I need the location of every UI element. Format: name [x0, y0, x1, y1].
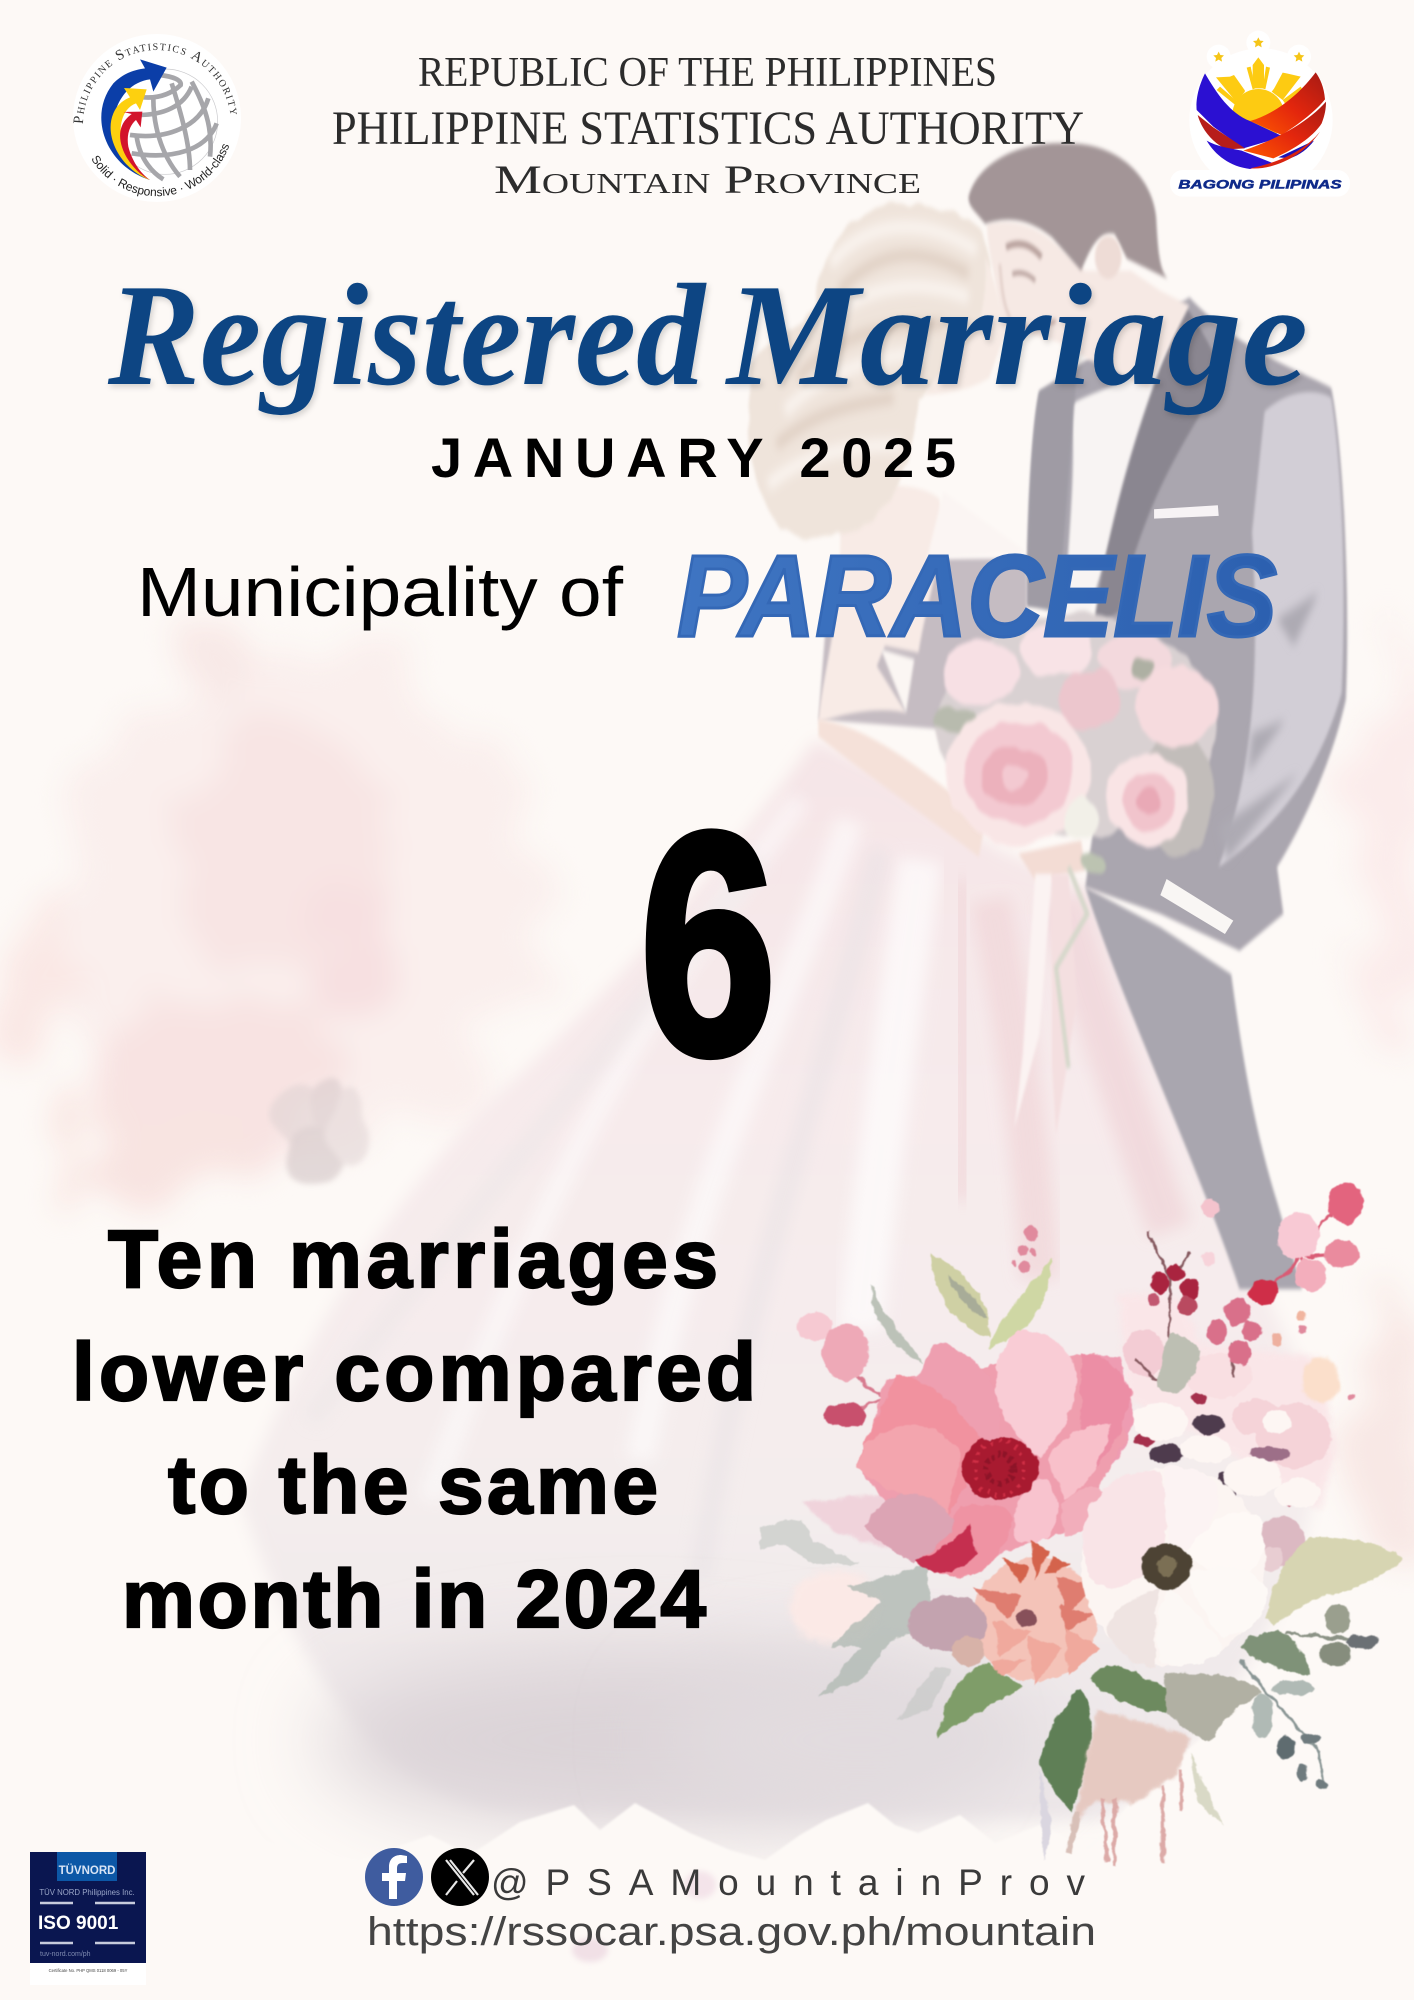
municipality label: Municipality of	[137, 553, 624, 631]
shirt	[1064, 308, 1185, 612]
paint drips	[1039, 1711, 1223, 1867]
statement line 4: month in 2024	[122, 1554, 706, 1645]
Bagong Pilipinas logo	[1170, 31, 1350, 197]
header line 1: REPUBLIC OF THE PHILIPPINES	[418, 50, 997, 96]
header: agency name	[332, 50, 1084, 202]
ribbon green strand	[1056, 867, 1087, 1068]
stars	[1213, 37, 1304, 62]
pink flower back wash	[1081, 1353, 1135, 1481]
upper right pink wash	[1119, 1293, 1335, 1509]
lower right green leaf	[1089, 1667, 1167, 1713]
badge blue tab	[57, 1852, 117, 1881]
left jacket panel	[1027, 371, 1077, 612]
badge site text: tuv-nord.com/ph	[40, 1951, 91, 1958]
top left leaf shadow	[948, 1275, 987, 1318]
watercolor wash: left pink clouds	[1, 630, 1414, 1550]
ribbon second strand	[1052, 874, 1077, 1135]
lower center green leaf	[1039, 1688, 1091, 1812]
red flower center	[961, 1437, 1038, 1500]
logo white disc	[73, 34, 241, 202]
badge navy panel	[30, 1852, 146, 1963]
bride back	[818, 486, 941, 723]
groom face	[987, 222, 1190, 388]
title word 2: Marriage	[725, 254, 1308, 416]
ribbon	[1014, 874, 1052, 1128]
title	[107, 254, 1308, 416]
icon: X	[431, 1848, 489, 1906]
badge tab text: TÜVNORD	[59, 1864, 115, 1877]
shirt cuff	[1160, 879, 1233, 934]
pink filler blossoms	[1123, 1330, 1331, 1468]
dark stems	[1135, 1231, 1233, 1385]
small white blossoms	[1133, 1402, 1321, 1507]
bride arm gap	[881, 649, 914, 713]
groom hair	[968, 143, 1168, 279]
statement line 3: to the same	[168, 1440, 658, 1531]
brown bud	[952, 1636, 985, 1666]
right olive leaf	[1265, 1536, 1402, 1626]
right red band	[1243, 102, 1326, 158]
left grey leaf	[871, 1284, 923, 1363]
watercolor wash: grey smudge	[276, 1079, 372, 1183]
badge white base	[30, 1852, 146, 1985]
logo wordmark: BAGONG PILIPINAS	[1178, 177, 1342, 191]
red main band	[1250, 72, 1325, 135]
trousers	[1085, 887, 1302, 1289]
left grey foliage	[760, 1518, 952, 1720]
website address: https://rssocar.psa.gov.ph/mountain	[367, 1910, 1096, 1954]
jacket folds	[1219, 592, 1319, 860]
lower blue band	[1207, 141, 1273, 169]
date: JANUARY 2025	[431, 426, 956, 489]
statement line 2: lower compared	[72, 1327, 756, 1418]
mauve succulent	[908, 1596, 987, 1651]
left pale wash	[789, 1571, 881, 1644]
badge lower rules	[40, 1942, 135, 1944]
lower right blue band	[1278, 141, 1314, 158]
header line 3: Mountain Province	[494, 157, 921, 202]
PSA logo	[73, 34, 241, 202]
coral flower	[973, 1541, 1100, 1686]
big number: 6	[640, 767, 776, 1120]
bride hand	[1019, 840, 1085, 880]
left pink buds	[797, 1311, 885, 1428]
white flower center	[1142, 1543, 1192, 1589]
bride hair highlights	[768, 227, 977, 485]
red berries	[1148, 1264, 1199, 1316]
globe and arrows	[101, 59, 218, 180]
grey leaves center	[1156, 1334, 1199, 1394]
orange wash	[1302, 1357, 1340, 1403]
right pink buds	[1249, 1183, 1363, 1305]
comparison statement	[72, 1214, 756, 1645]
pink berries	[1206, 1298, 1306, 1366]
badge certificate text: Certificate No. PHP QMS 0118 0069 - 05Y	[49, 1968, 128, 1973]
statement line 1: Ten marriages	[108, 1214, 718, 1305]
lapel	[1094, 306, 1223, 626]
watercolor wash: bottom grey-pink cloud with torn edge	[120, 1640, 1414, 2000]
dark filler between flowers	[1134, 1393, 1295, 1570]
badge company text: TÜV NORD Philippines Inc.	[39, 1888, 135, 1897]
bride neckline	[927, 492, 1027, 559]
groom facial features	[1000, 244, 1056, 329]
wedding dress illustration	[240, 740, 1321, 1820]
logo top arc text: Philippine Statistics Authority	[73, 43, 237, 124]
lower right grey-olive leaves	[1164, 1673, 1260, 1740]
groom ear	[1095, 236, 1122, 279]
bride hair	[747, 203, 990, 539]
suit jacket	[1027, 298, 1347, 951]
sticker outline	[1170, 31, 1350, 197]
bride face	[925, 257, 1006, 395]
bouquet	[935, 616, 1219, 873]
sun	[1216, 57, 1303, 141]
blue main band	[1196, 73, 1283, 148]
pocket square	[1154, 505, 1219, 519]
logo bottom arc text: Solid · Responsive · World-class	[92, 144, 229, 196]
social icons and handle	[365, 1848, 1096, 1954]
municipality name: PARACELIS	[677, 531, 1277, 661]
header line 2: PHILIPPINE STATISTICS AUTHORITY	[332, 102, 1084, 155]
icon: facebook	[365, 1848, 423, 1906]
badge ISO text: ISO 9001	[38, 1913, 119, 1934]
top right leaf	[989, 1256, 1052, 1347]
jacket sleeve highlight	[1219, 392, 1344, 867]
floral bouquet illustration	[760, 1183, 1402, 1867]
left red band	[1198, 115, 1245, 149]
bottom red band	[1250, 132, 1320, 168]
social handle: @PSAMountainProv	[491, 1862, 1086, 1903]
bride bodice	[818, 559, 1027, 733]
small pink splashes	[1012, 1199, 1355, 1400]
top left leaf	[930, 1252, 989, 1338]
right foliage	[1240, 1603, 1378, 1789]
big pink flower	[855, 1330, 1131, 1578]
title word 1: Registered	[107, 254, 707, 416]
lower left green leaves	[937, 1663, 1023, 1738]
big white flower	[1081, 1466, 1267, 1667]
badge upper rules	[40, 1902, 135, 1904]
left pink wash	[802, 1495, 893, 1550]
mauve blossoms	[1258, 1516, 1304, 1572]
bride forearm	[818, 720, 985, 857]
couple illustration: groom and bride	[747, 143, 1347, 1289]
ISO 9001 certification badge	[30, 1852, 146, 1985]
